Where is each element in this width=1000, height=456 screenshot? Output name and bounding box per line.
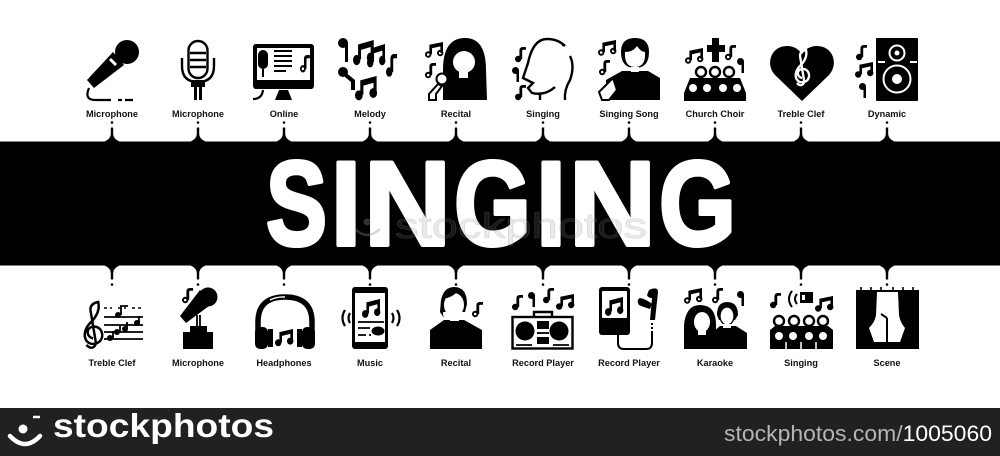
item: Online [253,44,314,119]
icon: woman singer [425,38,487,100]
item: Church Choir [684,38,746,119]
item: Recital [425,38,487,119]
item: Dynamic [855,38,918,119]
icon: studio microphone [182,41,214,100]
label: Scene [873,358,901,368]
icon: singing head profile [512,39,572,100]
icon: singer with note [430,287,483,349]
icon: choir with cross [684,38,746,101]
item: Music [342,287,400,368]
icon: heart with treble clef [770,46,834,101]
item: Karaoke [684,288,747,368]
label: Singing [526,109,560,119]
title: I [536,137,566,271]
central band [0,142,1000,266]
title: G [659,137,736,271]
footer bar [0,408,1000,456]
item: Melody [338,38,397,119]
label: Melody [354,109,387,119]
title: N [364,137,451,271]
icon: headphones with note [255,297,315,349]
label: Treble Clef [778,109,825,119]
label: Singing [784,358,818,368]
item: Record Player boombox [512,288,574,368]
item: Microphone [86,40,139,119]
icon: smartphone with sound waves [342,287,400,349]
icon: handheld microphone [87,40,139,100]
label: Karaoke [697,358,733,368]
title: I [331,137,361,271]
icon: loudspeaker with notes [855,38,918,101]
label: Microphone [86,109,138,119]
item: Headphones [255,297,315,368]
footer logo: stockphotos [53,407,274,444]
footer url: stockphotos.com/ 1005060 [724,421,992,446]
watermark over title: stockphotos [395,205,647,246]
label: Recital [441,358,471,368]
icon: boombox with notes [512,288,574,348]
item: Singing [512,39,572,119]
icon: music player with earphones [599,287,658,349]
label: Headphones [256,358,312,368]
icon: couple singing [684,288,747,349]
title: G [454,137,531,271]
item: Treble Clef heart [770,46,834,119]
title: N [569,137,656,271]
label: Music [357,358,383,368]
watermark over title [355,205,647,246]
icon: treble clef and staff [85,302,143,348]
label: Recital [441,109,471,119]
icon: monitor with microphone [253,44,314,100]
title: S [266,137,327,271]
label: Microphone [172,358,224,368]
item: Microphone studio [172,41,224,119]
label: Record Player [512,358,574,368]
item: Treble Clef staff [85,302,143,368]
bottom connectors [103,265,896,286]
item: Record Player portable [598,287,660,368]
icon: music notes [338,38,397,100]
item: Singing audience [770,291,833,368]
label: Singing Song [599,109,659,119]
top connectors [103,121,896,142]
label: Record Player [598,358,660,368]
icon: microphone on stand [180,288,218,349]
icon: stage curtains with microphone [856,287,919,349]
item: Singing Song [598,38,660,119]
icon: audience with spotlight [770,291,833,349]
item: Scene [856,287,919,368]
label: Online [270,109,298,119]
label: Dynamic [868,109,906,119]
label: Church Choir [686,109,745,119]
item: Microphone trophy [172,288,224,368]
label: Treble Clef [89,358,136,368]
label: Microphone [172,109,224,119]
item: Recital man [430,287,483,368]
icon: man singer [598,38,660,100]
